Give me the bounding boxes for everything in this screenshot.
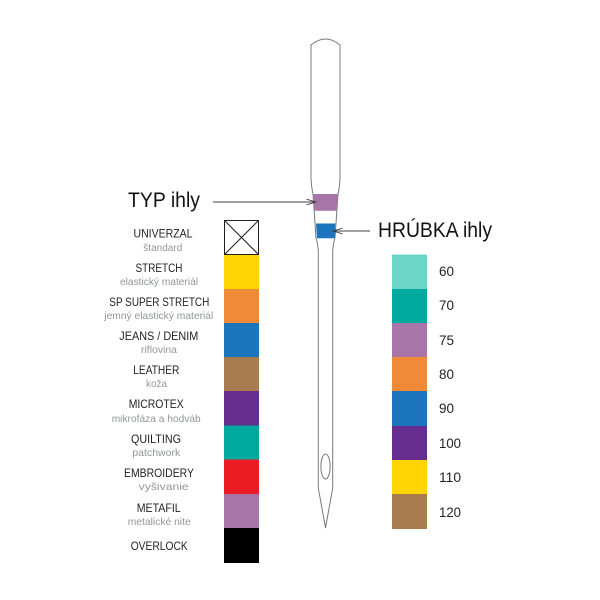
label: universal: štandard	[143, 242, 182, 254]
number: 100: 100	[439, 435, 461, 451]
number: 75: 75	[439, 332, 454, 348]
heading: thickness: HRÚBKA ihly	[378, 219, 492, 242]
arrow: thickness	[333, 228, 370, 234]
heading: type: TYP ihly	[128, 189, 200, 212]
label: microtex: MICROTEX	[129, 397, 184, 411]
label: quilting	[131, 432, 181, 459]
swatch: metafil	[224, 494, 259, 528]
swatch: stretch	[224, 255, 259, 289]
label: embroidery	[124, 466, 194, 493]
swatch: universal	[224, 220, 258, 254]
label: stretch	[120, 261, 198, 288]
needle outline	[311, 39, 340, 528]
number: 110: 110	[439, 469, 461, 485]
thickness colour column	[392, 254, 427, 529]
number: 90: 90	[439, 400, 454, 416]
label: universal	[134, 226, 193, 254]
label: embroidery: vyšivanie	[139, 481, 189, 493]
label: leather: koža	[146, 378, 167, 390]
type labels	[103, 226, 213, 553]
label: metafil: metalické nite	[128, 516, 191, 528]
swatch: 110	[392, 460, 427, 494]
swatch: 90	[392, 391, 427, 426]
label: leather: LEATHER	[133, 363, 180, 377]
label: jeans	[119, 329, 198, 356]
label: embroidery: EMBROIDERY	[124, 466, 194, 480]
needle type band	[313, 194, 338, 211]
label: stretch: elastický materiál	[120, 276, 198, 288]
type colour column	[224, 220, 259, 563]
swatch: 80	[392, 357, 427, 391]
label: jeans: JEANS / DENIM	[119, 329, 198, 343]
swatch: 100	[392, 426, 427, 460]
label: universal: UNIVERZAL	[134, 226, 193, 240]
swatch: embroidery	[224, 460, 259, 494]
label: quilting: patchwork	[132, 447, 181, 459]
swatch: jeans	[224, 323, 259, 357]
swatch: quilting	[224, 426, 259, 460]
label: metafil: METAFIL	[137, 501, 181, 515]
arrow: type	[213, 199, 316, 205]
label: super stretch: jemný elastický materiál	[103, 310, 213, 322]
label: super stretch	[103, 295, 213, 322]
swatch: 120	[392, 494, 427, 529]
label: leather	[133, 363, 180, 390]
swatch: 60	[392, 254, 427, 289]
swatch: overlock	[224, 528, 259, 563]
number: 70: 70	[439, 297, 454, 313]
number: 120: 120	[439, 504, 461, 520]
label: metafil	[128, 501, 191, 528]
swatch: microtex	[224, 391, 259, 426]
swatch: 75	[392, 323, 427, 357]
swatch: leather	[224, 357, 259, 391]
label: jeans: riflovina	[141, 344, 177, 356]
label: microtex	[112, 397, 201, 425]
thickness labels	[439, 263, 461, 520]
number: 60: 60	[439, 263, 454, 279]
label: quilting: QUILTING	[131, 432, 181, 446]
label: microtex: mikrofáza a hodváb	[112, 413, 201, 425]
swatch: super stretch	[224, 289, 259, 323]
swatch: 70	[392, 289, 427, 323]
label: stretch: STRETCH	[136, 261, 182, 275]
needle thickness band	[316, 224, 335, 238]
needle eye	[321, 454, 330, 479]
number: 80: 80	[439, 366, 454, 382]
label: overlock: OVERLOCK	[131, 539, 188, 553]
label: super stretch: SP SUPER STRETCH	[109, 295, 209, 309]
needle	[311, 39, 340, 528]
